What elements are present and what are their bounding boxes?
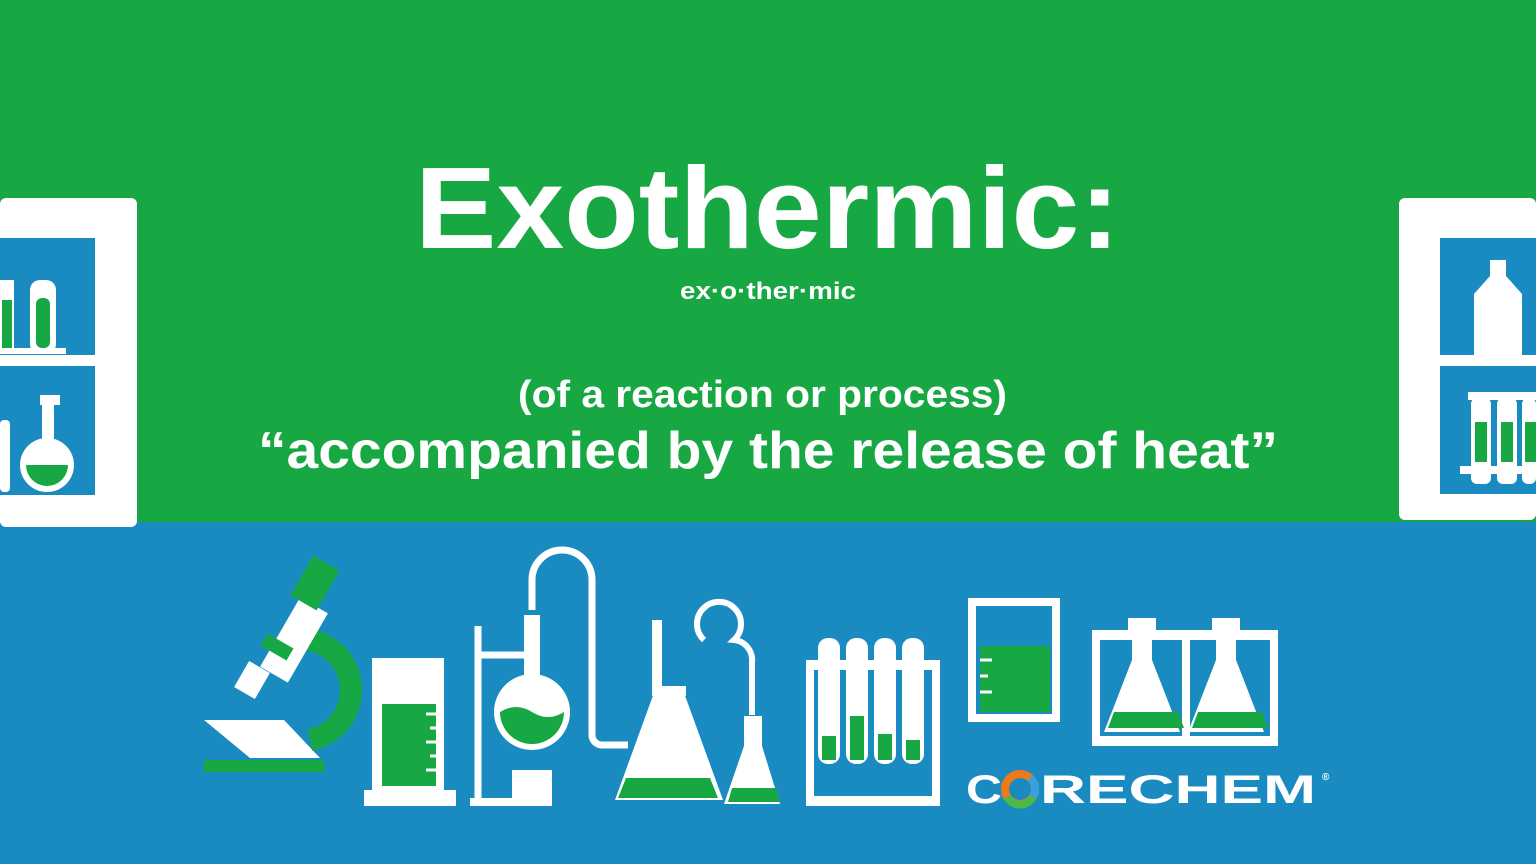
icon: graduated cylinder	[364, 658, 456, 806]
icon: distillation flask with tube	[478, 550, 628, 805]
icon: test tube rack	[806, 638, 940, 806]
right cabinet	[1399, 198, 1536, 520]
title: Exothermic:	[415, 143, 1120, 273]
left cabinet	[0, 198, 137, 527]
definition context: (of a reaction or process)	[518, 374, 1007, 416]
icon: two flasks in rack	[1092, 618, 1278, 746]
background blue bottom	[0, 522, 1536, 864]
logo: CORECHEM: ®	[1322, 772, 1330, 783]
logo: CORECHEM: RECHEM	[1040, 768, 1316, 812]
icon: erlenmeyer flask with tube	[615, 602, 780, 804]
background green top	[0, 0, 1536, 524]
logo: CORECHEM	[966, 768, 1330, 812]
definition quote: “accompanied by the release of heat”	[258, 422, 1278, 480]
icon: microscope	[204, 556, 351, 772]
icon: beaker	[968, 598, 1060, 722]
pronunciation: ex·o·ther·mic	[680, 278, 856, 305]
logo: CORECHEM: C	[966, 768, 1002, 812]
